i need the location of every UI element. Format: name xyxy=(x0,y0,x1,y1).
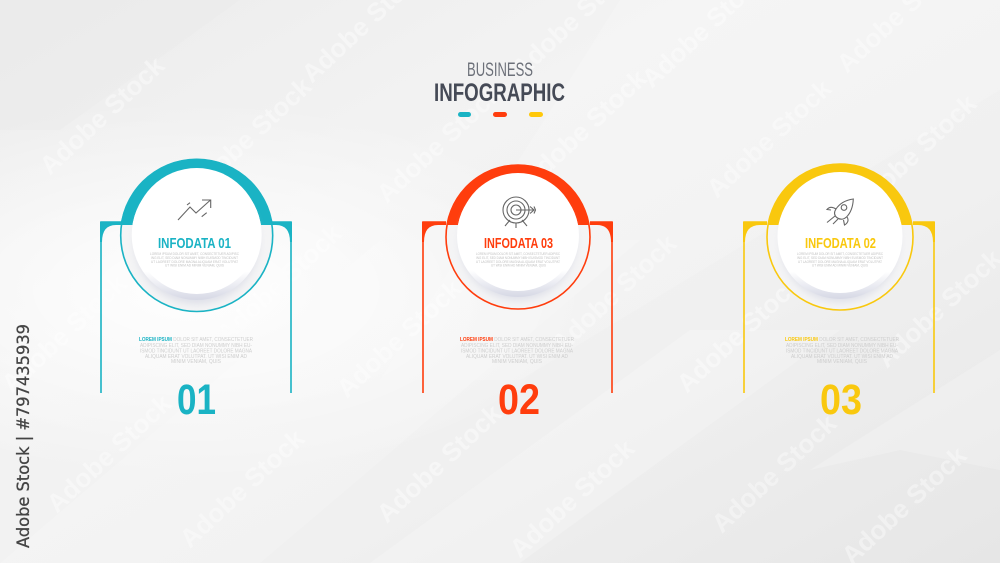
title block xyxy=(434,60,565,117)
panel: infodata 01 xyxy=(100,158,292,424)
disc text: UT LAOREET DOLORE MAGNA ALIQUAM ERAT VOLUTPAT xyxy=(798,260,882,264)
disc text: UT WISI ENIM AD MINIM VENIAM, QUIS xyxy=(812,264,869,268)
body text: ADIPISCING ELIT, SED DIAM NONUMMY NIBH EU- xyxy=(140,343,252,349)
disc text: LOREM IPSUM DOLOR SIT AMET, CONSECTETUER ADIPISC xyxy=(476,252,561,256)
heading: business: BUSINESS xyxy=(467,60,533,81)
body text: ISMOD TINCIDUNT UT LAOREET DOLORE MAGNA xyxy=(786,348,898,354)
disc text: UT WISI ENIM AD MINIM VENIAM, QUIS xyxy=(165,264,225,268)
panel: infodata 02 xyxy=(743,164,935,424)
colour dashes xyxy=(458,112,543,117)
disc xyxy=(778,172,902,302)
number: 01 xyxy=(177,376,216,424)
watermarks: Adobe Stock xyxy=(516,63,653,194)
body text: LOREM IPSUM DOLOR SIT AMET, CONSECTETUER xyxy=(785,337,899,343)
watermarks: Adobe Stock xyxy=(371,78,508,209)
disc text: UT LAOREET DOLORE MAGNA ALIQUAM ERAT VOLUTPAT xyxy=(151,260,238,264)
frame xyxy=(743,222,935,393)
disc text xyxy=(476,252,561,268)
frame xyxy=(422,222,613,393)
number: 02 xyxy=(498,376,540,424)
body text xyxy=(139,337,253,365)
icon: rocket xyxy=(827,199,853,225)
body text: MINIM VENIAM, QUIS xyxy=(817,359,867,365)
body text: MINIM VENIAM, QUIS xyxy=(492,359,542,365)
disc text: UT WISI ENIM AD MINIM VENIAM, QUIS xyxy=(491,264,547,268)
disc text xyxy=(150,252,240,268)
ring and arc xyxy=(446,164,590,310)
watermarks: Adobe Stock xyxy=(846,88,983,219)
body text xyxy=(460,337,574,365)
panel: infodata 03 xyxy=(422,164,613,424)
watermarks: Adobe Stock xyxy=(174,423,311,554)
body text xyxy=(785,337,899,365)
ring and arc xyxy=(120,158,274,312)
label: INFODATA 02 xyxy=(805,235,876,252)
watermarks: Adobe Stock xyxy=(504,433,641,563)
body text: ADIPISCING ELIT, SED DIAM NONUMMY NIBH EU- xyxy=(461,343,573,349)
heading: infographic: INFOGRAPHIC xyxy=(434,79,565,107)
watermarks: Adobe Stock xyxy=(706,408,843,539)
label: INFODATA 03 xyxy=(484,235,553,252)
disc xyxy=(132,168,262,304)
icon: rising arrow xyxy=(178,200,211,220)
disc text: ING ELIT, SED DIAM NONUMMY NIBH EUISMOD TINCIDUNT xyxy=(151,256,238,260)
watermarks: Adobe Stock xyxy=(701,73,838,204)
frame xyxy=(100,222,292,393)
watermarks: Adobe Stock xyxy=(181,71,318,202)
body text: ADIPISCING ELIT, SED DIAM NONUMMY NIBH EU- xyxy=(786,343,898,349)
body text: LOREM IPSUM DOLOR SIT AMET, CONSECTETUER xyxy=(460,337,574,343)
side credit: Adobe Stock | #797435939 xyxy=(14,324,34,548)
body text: ISMOD TINCIDUNT UT LAOREET DOLORE MAGNA xyxy=(461,348,573,354)
body text: ISMOD TINCIDUNT UT LAOREET DOLORE MAGNA xyxy=(140,348,252,354)
disc text: LOREM IPSUM DOLOR SIT AMET, CONSECTETUER ADIPISC xyxy=(150,252,240,256)
disc text: ING ELIT, SED DIAM NONUMMY NIBH EUISMOD TINCIDUNT xyxy=(476,256,560,260)
icon: target xyxy=(503,197,536,228)
body text: ALIQUAM ERAT VOLUTPAT. UT WISI ENIM AD xyxy=(466,354,568,360)
body text: MINIM VENIAM, QUIS xyxy=(171,359,221,365)
body text: ALIQUAM ERAT VOLUTPAT. UT WISI ENIM AD xyxy=(145,354,247,360)
watermarks: Adobe Stock xyxy=(34,50,171,181)
watermarks: Adobe Stock xyxy=(671,268,808,399)
body text: LOREM IPSUM DOLOR SIT AMET, CONSECTETUER xyxy=(139,337,253,343)
watermarks: Adobe Stock xyxy=(546,228,683,359)
ring and arc xyxy=(766,164,914,310)
number: 03 xyxy=(820,376,862,424)
disc xyxy=(457,173,579,300)
watermarks: Adobe Stock xyxy=(331,273,468,404)
watermarks: Adobe Stock xyxy=(211,218,348,349)
disc text: ING ELIT, SED DIAM NONUMMY NIBH EUISMOD TINCIDUNT xyxy=(797,256,883,260)
disc text xyxy=(797,252,884,268)
watermarks: Adobe Stock xyxy=(41,388,178,519)
watermarks: Adobe Stock xyxy=(371,398,508,529)
body text: ALIQUAM ERAT VOLUTPAT. UT WISI ENIM AD xyxy=(791,354,893,360)
label: INFODATA 01 xyxy=(158,235,231,252)
disc text: LOREM IPSUM DOLOR SIT AMET, CONSECTETUER ADIPISC xyxy=(797,252,884,256)
disc text: UT LAOREET DOLORE MAGNA ALIQUAM ERAT VOLUTPAT xyxy=(476,260,560,264)
